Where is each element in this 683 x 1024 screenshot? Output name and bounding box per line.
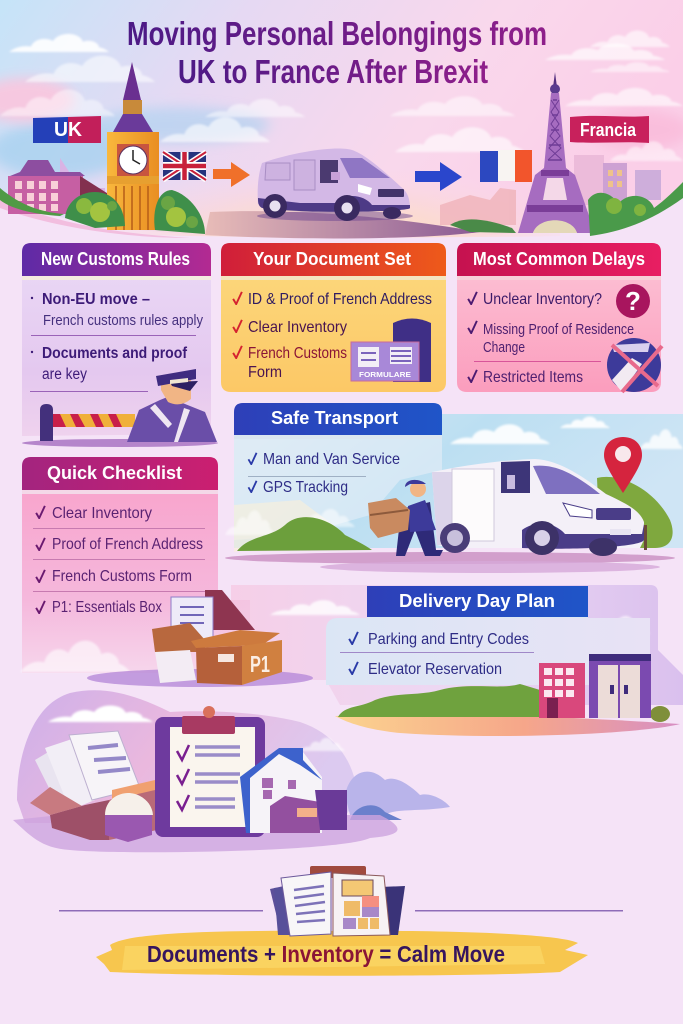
illustration: documents, clipboard and house <box>13 690 450 852</box>
text block: delay reasons: Change <box>483 339 525 356</box>
trees near Eiffel Tower <box>450 182 683 236</box>
panel: Most Common Delays <box>457 243 662 392</box>
divider line right <box>415 910 623 912</box>
title: UK to France After Brexit <box>178 53 488 90</box>
icon: Big Ben tower <box>107 62 159 230</box>
ground and trees <box>335 684 680 736</box>
text block: customs rules: Documents and proof <box>42 345 188 362</box>
icon: Eiffel Tower <box>518 72 595 233</box>
ground and bushes <box>225 477 675 573</box>
text block: document checklist <box>233 291 432 381</box>
text block: delivery day tasks: Parking and Entry Codes <box>368 631 529 648</box>
divider line left <box>59 910 263 912</box>
icon: cardboard box <box>30 780 157 840</box>
text block: customs rules <box>30 291 203 392</box>
text block: delay reasons: Missing Proof of Residence <box>483 321 634 338</box>
right city skyline <box>440 155 661 225</box>
left city buildings <box>8 158 110 214</box>
icon: basket with linen <box>105 793 153 842</box>
text block: customs rules: are key <box>42 366 87 383</box>
icon: moving van <box>257 149 413 221</box>
heading: Most Common Delays <box>457 243 661 280</box>
UK banner label <box>33 116 101 143</box>
Francia banner label <box>570 116 649 143</box>
title: Moving Personal Belongings from <box>127 15 547 52</box>
icon: French customs form <box>351 318 431 382</box>
icon: restricted items <box>607 338 662 392</box>
icon: clipboard with checks <box>155 706 265 837</box>
heading: Delivery Day Plan <box>367 586 588 620</box>
icon: P1 essentials boxes: P1 <box>250 651 270 677</box>
panel: Your Document Set <box>221 243 446 392</box>
panel: Quick Checklist <box>20 457 250 673</box>
text block: checklist items: P1: Essentials Box <box>52 599 162 616</box>
Francia banner label: Francia <box>580 120 637 140</box>
heading: Most Common Delays: Most Common Delays <box>473 249 645 269</box>
panel: New Customs Rules <box>22 243 218 447</box>
text block: document checklist: Form <box>248 364 282 381</box>
yellow brush banner with slogan <box>96 931 588 976</box>
text block: delay reasons: Restricted Items <box>483 369 583 386</box>
heading: Your Document Set <box>221 243 446 280</box>
icon: map pin <box>604 437 642 493</box>
clouds beside house <box>345 772 450 820</box>
icon: pink apartment building <box>539 663 585 718</box>
text block: checklist items: Proof of French Address <box>52 536 203 553</box>
icon: house <box>240 748 347 833</box>
icon: P1 essentials boxes <box>87 590 313 687</box>
heading: Quick Checklist: Quick Checklist <box>47 463 182 483</box>
text block: checklist items: Clear Inventory <box>52 505 152 522</box>
icon: customs barrier <box>22 404 218 447</box>
ground shadow <box>13 815 398 852</box>
icon: France flag <box>480 150 532 182</box>
icon: worker carrying box <box>368 480 443 556</box>
heading: Safe Transport <box>234 403 442 439</box>
heading: New Customs Rules: New Customs Rules <box>41 249 190 269</box>
heading: Your Document Set: Your Document Set <box>253 249 411 269</box>
UK banner label: UK <box>54 119 83 141</box>
text block: document checklist: ID & Proof of French Address <box>248 291 432 308</box>
text block: delay reasons <box>468 291 634 386</box>
text block: delivery day tasks <box>326 618 650 685</box>
icon: delivery truck <box>432 459 644 556</box>
text block: transport services: Man and Van Service <box>263 451 400 468</box>
icon: French customs form: FORMULARE <box>359 370 411 379</box>
text block: customs rules: Non-EU move – <box>42 291 150 308</box>
text block: transport services: GPS Tracking <box>263 479 348 496</box>
text block: transport services <box>248 451 400 496</box>
text block: customs rules: French customs rules apply <box>43 312 203 329</box>
heading: New Customs Rules <box>22 243 211 280</box>
text block: document checklist: Clear Inventory <box>248 319 347 336</box>
trees near Big Ben <box>0 188 205 234</box>
panel: Safe Transport <box>225 403 683 573</box>
title <box>127 15 547 90</box>
text block: checklist items: French Customs Form <box>52 568 192 585</box>
icon: question mark <box>616 284 650 318</box>
text block: delivery day tasks: Elevator Reservation <box>368 661 502 678</box>
icon: UK flag <box>163 152 206 180</box>
heading: Quick Checklist <box>22 457 218 494</box>
panel: Delivery Day Plan <box>231 585 683 736</box>
icon: customs officer <box>127 369 217 442</box>
text block: document checklist: French Customs <box>248 345 347 362</box>
icon: open book with documents <box>270 866 405 936</box>
arrow: orange <box>213 162 250 187</box>
icon: question mark: ? <box>625 286 641 316</box>
arrow: blue <box>415 162 462 191</box>
icon: purple entrance building <box>589 654 651 718</box>
heading: Safe Transport: Safe Transport <box>271 408 398 428</box>
heading: Delivery Day Plan: Delivery Day Plan <box>399 591 555 611</box>
hero banner scene <box>0 0 683 238</box>
icon: pile of papers <box>35 731 140 810</box>
text block: checklist items <box>33 505 205 616</box>
text block: delay reasons: Unclear Inventory? <box>483 291 602 308</box>
slogan text: Documents + Inventory = Calm Move <box>147 941 505 967</box>
